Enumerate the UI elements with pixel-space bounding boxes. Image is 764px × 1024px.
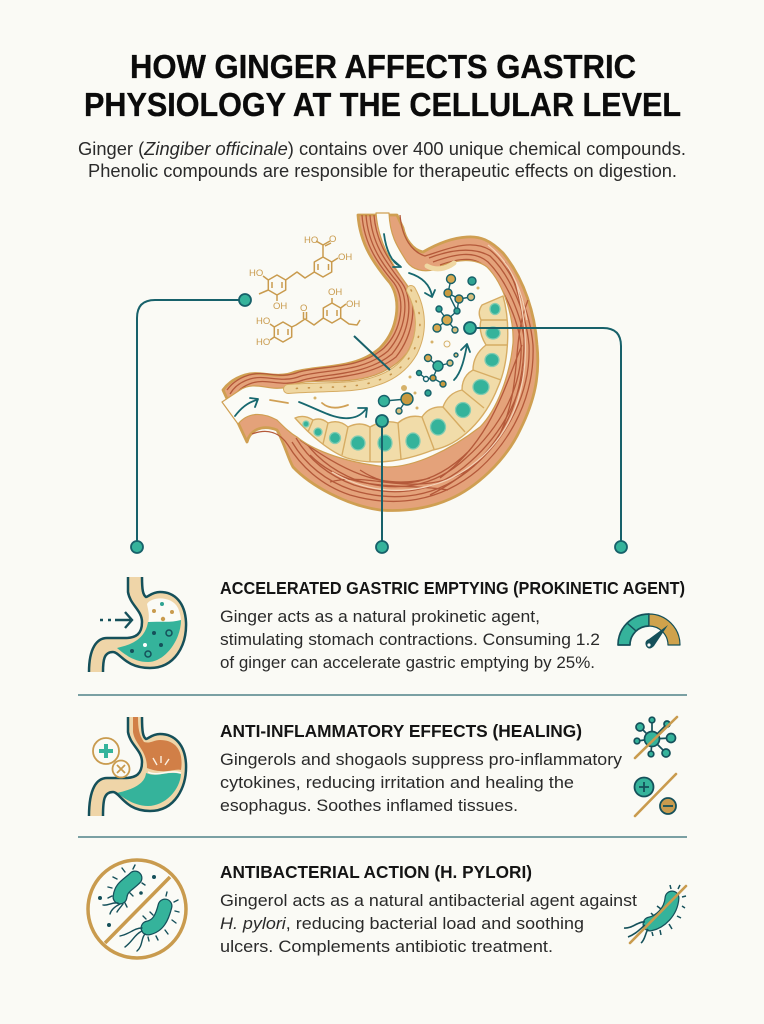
divider: [78, 836, 687, 838]
body: antibacterial action: ulcers. Complements antibiotic treatment.: [220, 937, 553, 956]
stomach muscle wall: [223, 215, 538, 511]
body: accelerated gastric emptying: [220, 607, 600, 672]
chemical structures: OH: [273, 301, 287, 312]
chemical structures: HO: [256, 337, 270, 348]
icon: stomach emptying: [89, 577, 186, 672]
body: anti-inflammatory effects: cytokines, reducing irritation and healing the: [220, 773, 574, 792]
chemical structures: OH: [338, 252, 352, 263]
icon: gauge: [618, 614, 680, 648]
chemical structures: HO: [304, 235, 318, 246]
title: HOW GINGER AFFECTS GASTRIC: [130, 48, 636, 85]
pointer into lesser curve: [354, 336, 390, 370]
chemical structures: HO: [249, 268, 263, 279]
epithelial cells with nuclei: [295, 296, 508, 462]
heading: accelerated gastric emptying: ACCELERATED GASTRIC EMPTYING (PROKINETIC AGENT): [220, 578, 685, 598]
icon: plus and minus with slash: [634, 774, 676, 816]
bacterium lower: [120, 892, 179, 951]
icon: no bacteria: [88, 860, 186, 958]
body: accelerated gastric emptying: of ginger can accelerate gastric emptying by 25%.: [220, 653, 595, 672]
connector: middle: [376, 415, 388, 553]
subtitle text: [78, 139, 686, 181]
flow arrows: [235, 234, 470, 418]
bacterium upper: [103, 865, 145, 914]
connector: left: [131, 294, 251, 553]
body: accelerated gastric emptying: stimulating stomach contractions. Consuming 1.2: [220, 630, 600, 649]
chemical structures: [249, 234, 360, 348]
mucosal bumps, lesser curve: [288, 263, 454, 389]
title: [84, 48, 681, 123]
icon: cytokine with slash: [634, 717, 677, 758]
body: antibacterial action: [220, 891, 637, 956]
subtitle text: Ginger (Zingiber officinale) contains over 400 unique chemical compounds.: [78, 139, 686, 159]
heading: antibacterial action: ANTIBACTERIAL ACTION (H. PYLORI): [220, 862, 532, 882]
body: antibacterial action: H. pylori, reducing bacterial load and soothing: [220, 914, 584, 933]
body: antibacterial action: Gingerol acts as a natural antibacterial agent against: [220, 891, 637, 910]
drug molecules in lumen: [378, 274, 476, 414]
chemical structures: O: [300, 303, 307, 314]
subtitle text: Phenolic compounds are responsible for therapeutic effects on digestion.: [88, 161, 677, 181]
chemical structures: O: [329, 234, 336, 245]
icon: healing stomach: [89, 717, 186, 816]
chemical structures: OH: [346, 299, 360, 310]
divider: [78, 694, 687, 696]
connector: right: [464, 322, 627, 553]
body: anti-inflammatory effects: esophagus. Soothes inflamed tissues.: [220, 796, 518, 815]
heading: anti-inflammatory effects: ANTI-INFLAMMATORY EFFECTS (HEALING): [220, 721, 582, 741]
stomach cross-section diagram: [222, 213, 538, 511]
body: accelerated gastric emptying: Ginger acts as a natural prokinetic agent,: [220, 607, 540, 626]
chemical structures: OH: [328, 287, 342, 298]
title: PHYSIOLOGY AT THE CELLULAR LEVEL: [84, 86, 681, 123]
body: anti-inflammatory effects: Gingerols and shogaols suppress pro-inflammatory: [220, 750, 623, 769]
stomach lumen: [222, 213, 513, 467]
icon: bacterium with slash: [624, 885, 686, 943]
body: anti-inflammatory effects: [220, 750, 623, 815]
chemical structures: HO: [256, 316, 270, 327]
muscle fibres: [227, 215, 533, 501]
